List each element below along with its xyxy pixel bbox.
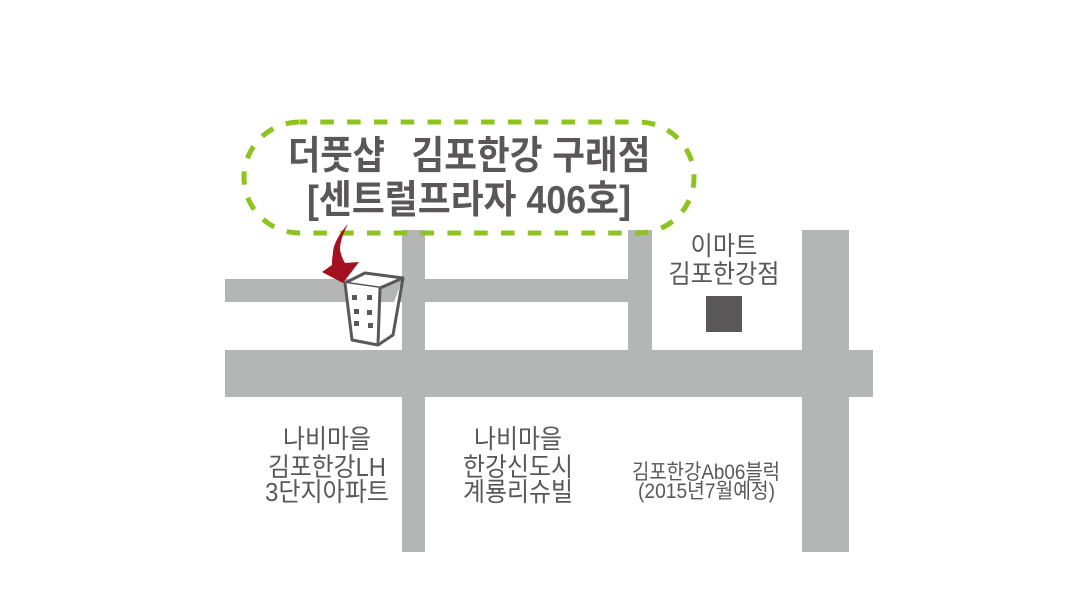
label: Nabi Village LH apartments: 나비마을 xyxy=(283,424,371,454)
icon: E-Mart marker xyxy=(706,296,742,332)
arrow: pointing to building xyxy=(322,224,359,283)
label: Nabi Village Hangang new town: 계룡리슈빌 xyxy=(463,477,573,507)
callout: store name in dashed pill xyxy=(244,122,694,233)
label: Ab06 block: (2015년7월예정) xyxy=(638,480,775,503)
icon: building xyxy=(345,273,403,345)
label: Nabi Village Hangang new town xyxy=(463,424,573,507)
label: Ab06 block xyxy=(632,461,780,503)
label: Nabi Village LH apartments: 김포한강LH xyxy=(268,452,386,482)
label: E-Mart: 김포한강점 xyxy=(668,259,780,289)
callout: store name in dashed pill: 더풋샵 xyxy=(288,135,385,178)
label: Ab06 block: 김포한강Ab06블럭 xyxy=(632,461,780,484)
label: Nabi Village LH apartments: 3단지아파트 xyxy=(265,477,389,507)
label: Nabi Village Hangang new town: 한강신도시 xyxy=(463,452,573,482)
road network xyxy=(225,230,873,552)
label: Nabi Village LH apartments xyxy=(265,424,389,507)
label: E-Mart: 이마트 xyxy=(690,231,758,261)
label: Nabi Village Hangang new town: 나비마을 xyxy=(474,424,562,454)
callout: store name in dashed pill: [센트럴프라자 406호] xyxy=(307,179,631,222)
callout: store name in dashed pill: 김포한강 구래점 xyxy=(412,135,650,178)
label: E-Mart xyxy=(668,231,780,289)
